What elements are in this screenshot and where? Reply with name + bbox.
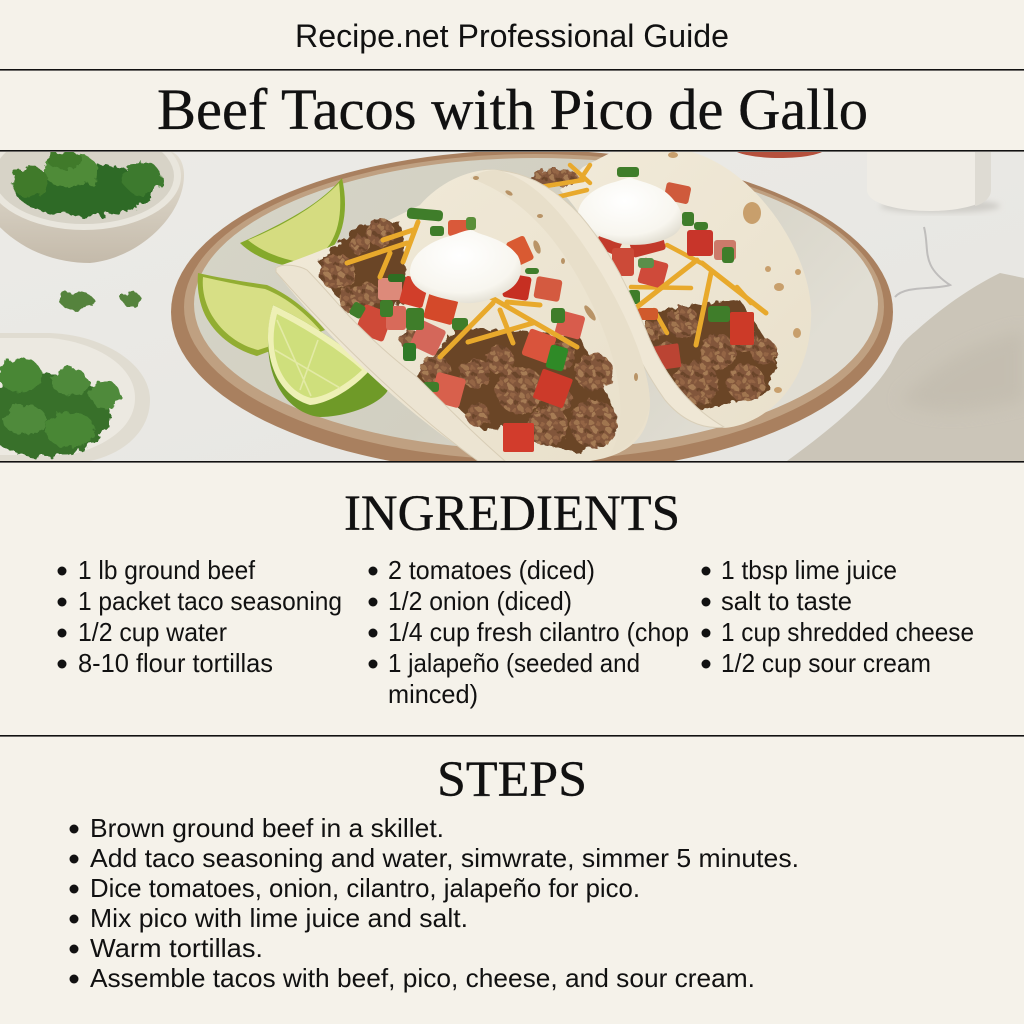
icon: bowl of cilantro, top left bbox=[0, 152, 184, 263]
ingredients column 2: minced) bbox=[388, 679, 478, 709]
icon: back taco bbox=[483, 152, 811, 428]
steps list: Add taco seasoning and water, simwrate, simmer 5 minutes. bbox=[90, 843, 799, 873]
steps list: Dice tomatoes, onion, cilantro, jalapeño for pico. bbox=[90, 873, 640, 903]
steps list: Assemble tacos with beef, pico, cheese, and sour cream. bbox=[90, 963, 755, 993]
heading: ingredients: INGREDIENTS bbox=[344, 486, 680, 542]
title: Beef Tacos with Pico de Gallo bbox=[157, 77, 868, 142]
ingredients column 1: 1 packet taco seasoning bbox=[78, 586, 342, 616]
back taco front fold bbox=[483, 170, 724, 427]
back taco toppings bbox=[540, 165, 766, 371]
ingredients column 2 bbox=[368, 555, 689, 709]
heading: steps: STEPS bbox=[437, 752, 587, 808]
icon: plate bbox=[171, 150, 893, 474]
icon: napkin bbox=[787, 273, 1024, 461]
icon: lime wedge left bbox=[198, 273, 325, 356]
icon: cup, top right bbox=[867, 152, 1000, 213]
ingredients column 1: 1 lb ground beef bbox=[78, 555, 256, 585]
steps list: Brown ground beef in a skillet. bbox=[90, 813, 444, 843]
ingredients column 3 bbox=[702, 555, 974, 678]
steps list: Mix pico with lime juice and salt. bbox=[90, 903, 468, 933]
hero photo: beef tacos on a plate bbox=[0, 152, 1024, 461]
ingredients column 2: 2 tomatoes (diced) bbox=[388, 555, 595, 585]
front taco beef bbox=[318, 218, 618, 453]
ingredients column 3: 1 tbsp lime juice bbox=[721, 555, 897, 585]
ingredients column 3: 1 cup shredded cheese bbox=[721, 617, 974, 647]
icon: cilantro leaves on counter bbox=[60, 292, 141, 310]
front taco toppings bbox=[347, 207, 586, 452]
ingredients column 2: 1 jalapeño (seeded and bbox=[388, 648, 640, 678]
ingredients column 3: salt to taste bbox=[721, 586, 852, 616]
ingredients column 2: 1/2 onion (diced) bbox=[388, 586, 572, 616]
icon: front taco bbox=[276, 170, 650, 461]
icon: lime wedge top bbox=[240, 178, 345, 268]
steps list: Warm tortillas. bbox=[90, 933, 263, 963]
header: brand line: Recipe.net Professional Guide bbox=[295, 18, 729, 54]
steps list bbox=[70, 813, 799, 993]
icon: lime slice bbox=[268, 305, 388, 417]
icon: sauce bowl, top edge bbox=[737, 152, 822, 158]
ingredients column 1: 1/2 cup water bbox=[78, 617, 227, 647]
ingredients column 2: 1/4 cup fresh cilantro (chop bbox=[388, 617, 689, 647]
ingredients column 1: 8-10 flour tortillas bbox=[78, 648, 273, 678]
back taco beef bbox=[531, 169, 778, 410]
icon: bowl of cilantro, bottom left bbox=[0, 333, 150, 462]
front taco front fold bbox=[276, 265, 505, 461]
ingredients column 1 bbox=[58, 555, 342, 678]
ingredients column 3: 1/2 cup sour cream bbox=[721, 648, 931, 678]
